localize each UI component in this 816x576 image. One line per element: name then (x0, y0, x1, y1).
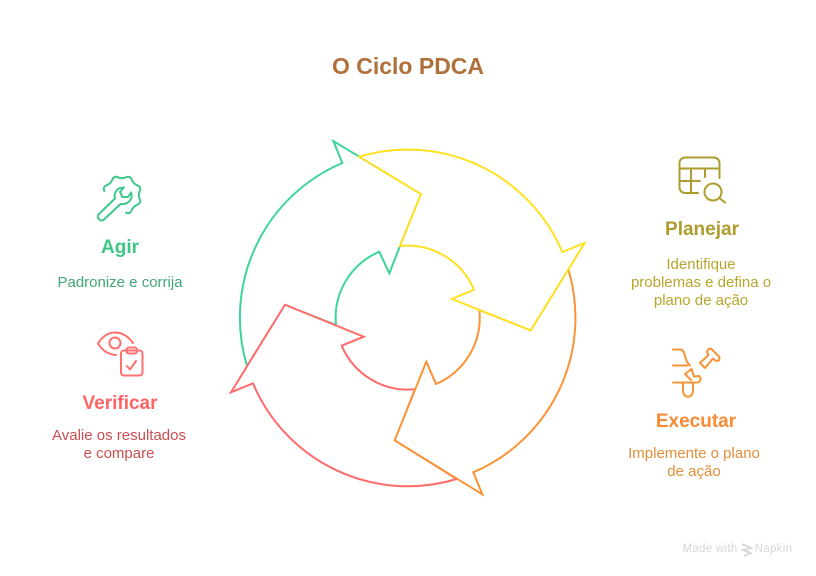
icon: napkin logo (742, 544, 751, 556)
panel: agir (57, 177, 183, 291)
description: verificar: Avalie os resultados (52, 427, 186, 444)
cycle diagram (231, 141, 585, 494)
panel: planejar (631, 158, 771, 309)
arrow: verificar (red) (231, 305, 457, 486)
watermark: made with napkin (682, 543, 792, 556)
arrow: planejar (yellow) (359, 150, 585, 330)
icon: tools (673, 348, 720, 397)
description: agir: Padronize e corrija (57, 274, 183, 291)
arrow: executar (orange) (395, 269, 575, 494)
description: planejar: problemas e defina o (631, 274, 771, 291)
watermark: made with napkin: Made with (682, 543, 738, 555)
icon: gear and wrench (98, 177, 140, 220)
heading: verificar: Verificar (82, 393, 158, 414)
description: verificar: e compare (84, 445, 154, 462)
heading: executar: Executar (656, 411, 737, 432)
icon: table with magnifier (680, 158, 725, 202)
heading: planejar: Planejar (665, 219, 740, 240)
description: executar: de ação (667, 463, 721, 480)
heading: agir: Agir (101, 237, 140, 258)
icon: eye and clipboard (98, 332, 142, 376)
panel: verificar (52, 332, 186, 462)
description: planejar: plano de ação (654, 292, 748, 309)
title: O Ciclo PDCA (332, 53, 484, 79)
panel: executar (628, 348, 760, 480)
description: executar: Implemente o plano (628, 445, 760, 462)
description: planejar: Identifique (666, 256, 736, 273)
arrow: agir (green) (240, 141, 421, 366)
watermark: made with napkin: Napkin (755, 543, 792, 555)
